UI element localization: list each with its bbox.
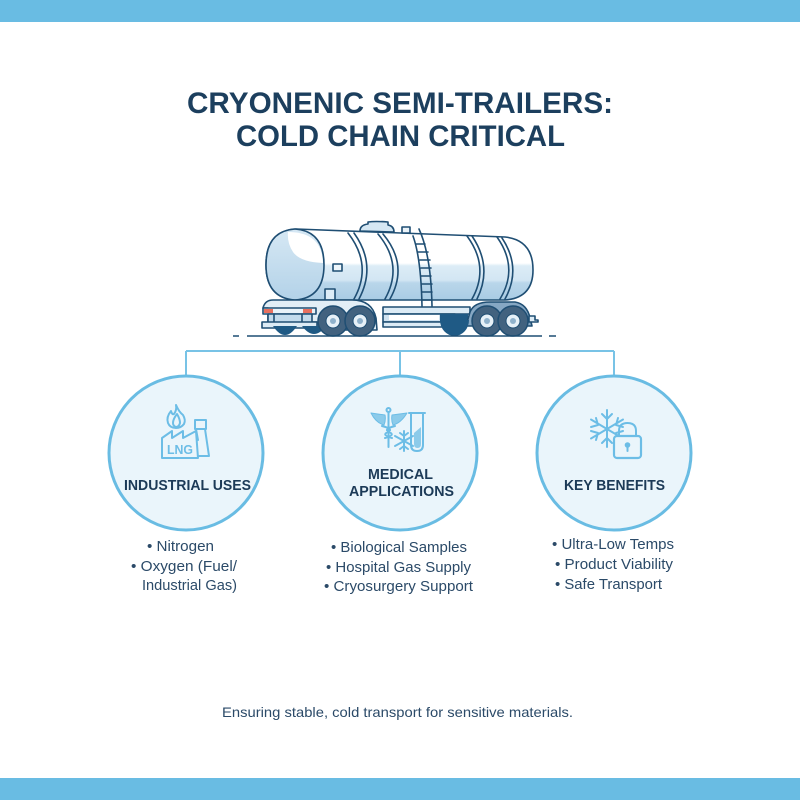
hatch and small box bbox=[333, 264, 342, 271]
list: medical applications bbox=[324, 540, 473, 595]
circle: key benefits bbox=[537, 376, 691, 530]
icon: LNG factory with flame bbox=[162, 405, 209, 458]
tank bands bbox=[348, 233, 367, 299]
icon: caduceus, snowflake and test tube bbox=[371, 408, 425, 451]
list: key benefits bbox=[552, 537, 674, 593]
title: CRYONENIC SEMI-TRAILERS: bbox=[187, 87, 613, 120]
wheels, drop wheels bbox=[273, 320, 469, 336]
front wheel 1 bbox=[318, 306, 348, 336]
tank body bbox=[266, 229, 533, 300]
tank top fittings bbox=[360, 222, 394, 232]
bottom band bbox=[0, 778, 800, 800]
top band bbox=[0, 0, 800, 22]
rear wheel 2 bbox=[498, 306, 528, 336]
footer caption: Ensuring stable, cold transport for sensitive materials. bbox=[222, 704, 573, 720]
title bbox=[187, 87, 613, 153]
icon: snowflake and padlock bbox=[591, 410, 641, 458]
front wheel 2 bbox=[345, 306, 375, 336]
panel: medical applications bbox=[323, 376, 477, 530]
title: COLD CHAIN CRITICAL bbox=[236, 120, 565, 153]
panel: industrial uses bbox=[109, 376, 263, 530]
connector lines bbox=[186, 351, 614, 376]
ladder bbox=[413, 229, 432, 306]
rear frame bbox=[466, 302, 532, 326]
panel: key benefits bbox=[537, 376, 691, 530]
circle: medical bbox=[323, 376, 477, 530]
front frame bbox=[263, 300, 377, 330]
heading: KEY BENEFITS bbox=[564, 478, 665, 494]
list: key benefits: • Product Viability bbox=[555, 557, 674, 573]
rear wheel 1 bbox=[472, 306, 502, 336]
list: medical applications: • Cryosurgery Support bbox=[324, 579, 473, 595]
heading: INDUSTRIAL USES bbox=[124, 478, 251, 494]
icon: LNG factory with flame: LNG bbox=[167, 443, 193, 457]
panel: medical applications: APPLICATIONS bbox=[349, 484, 454, 500]
chassis rail bbox=[383, 307, 470, 314]
list: industrial uses bbox=[131, 539, 238, 594]
tank front cap bbox=[266, 229, 324, 300]
list: key benefits: • Ultra-Low Temps bbox=[552, 537, 674, 553]
list: industrial uses: Industrial Gas) bbox=[142, 578, 237, 594]
heading: MEDICAL bbox=[368, 467, 433, 483]
circle: industrial bbox=[109, 376, 263, 530]
illustration: cryogenic tanker semi-trailer bbox=[233, 222, 556, 336]
list: industrial uses: • Oxygen (Fuel/ bbox=[131, 559, 238, 575]
list: key benefits: • Safe Transport bbox=[555, 577, 662, 593]
list: industrial uses: • Nitrogen bbox=[147, 539, 214, 555]
list: medical applications: • Hospital Gas Supply bbox=[326, 560, 472, 576]
list: medical applications: • Biological Samples bbox=[331, 540, 467, 556]
ground line bbox=[233, 335, 556, 337]
